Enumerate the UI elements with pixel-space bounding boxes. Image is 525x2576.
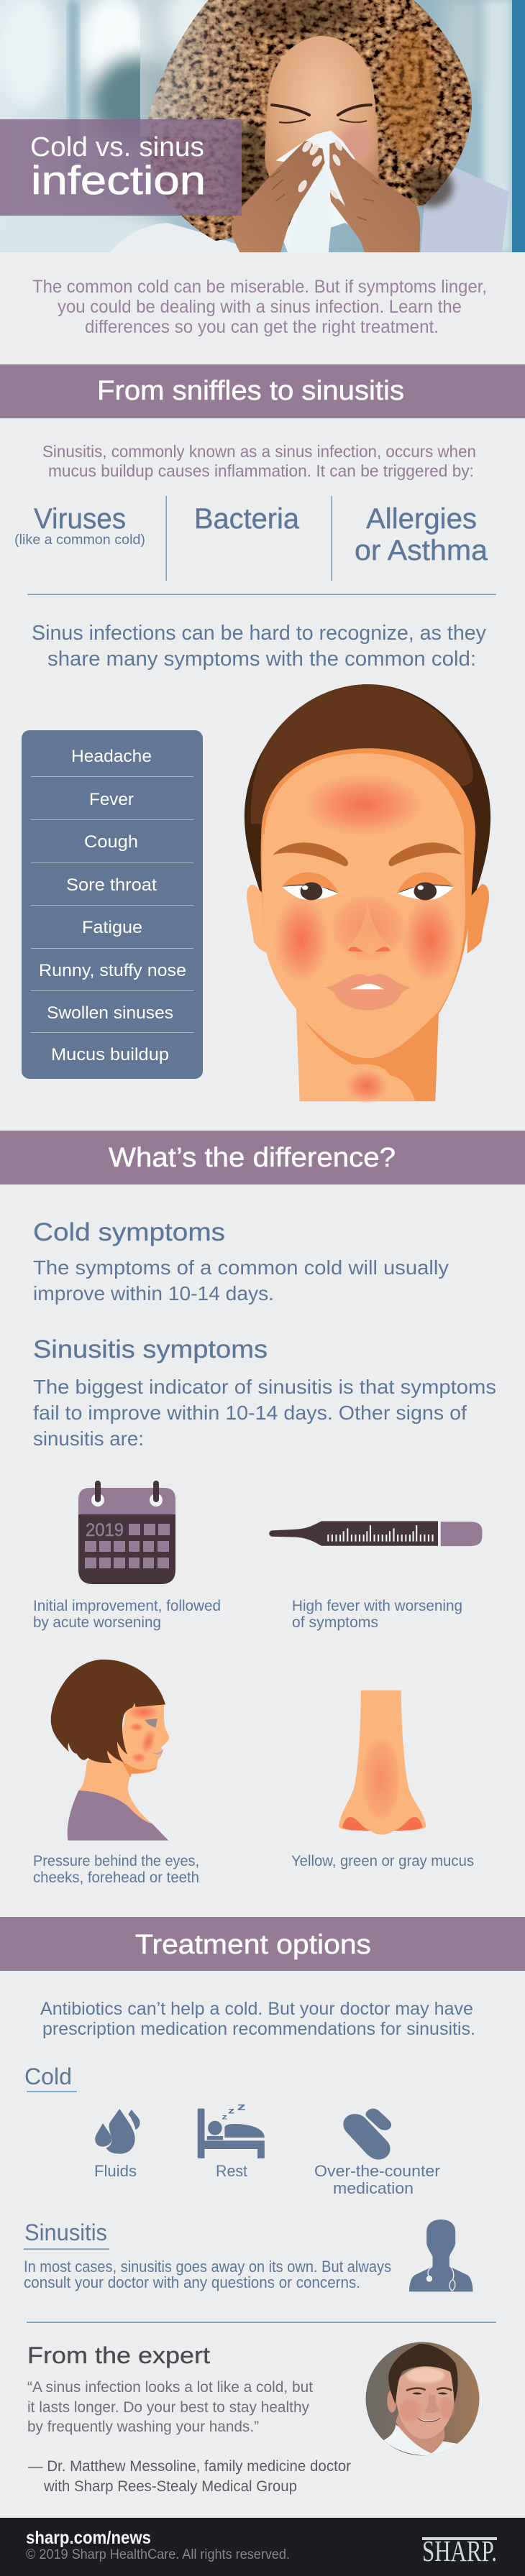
triggers row: (like a common cold) <box>14 533 145 548</box>
footer <box>0 2518 525 2576</box>
icon: medication capsules <box>343 2109 391 2160</box>
footer link: sharp.com/news <box>26 2528 151 2548</box>
icon: rest <box>198 2101 265 2158</box>
sinusitis symptoms text: Sinusitis symptoms <box>33 1335 268 1363</box>
icon: thermometer <box>269 1521 482 1546</box>
panel: symptom list <box>22 730 203 1079</box>
cold treatment labels: Rest <box>216 2162 247 2180</box>
triggers row: or Asthma <box>355 535 488 566</box>
section header: from sniffles to sinusitis: From sniffles to sinusitis <box>97 376 404 406</box>
panel: symptom list: Mucus buildup <box>51 1045 169 1064</box>
heading: from the expert: From the expert <box>27 2342 210 2368</box>
illustration: inflamed nose <box>339 1690 426 1835</box>
cold symptoms text <box>33 1218 449 1305</box>
hero title overlay <box>0 119 242 216</box>
subheading: cold: Cold <box>24 2064 72 2089</box>
expert quote <box>27 2379 313 2435</box>
shared symptoms lead-in: Sinus infections can be hard to recognize, as they <box>32 622 486 645</box>
section header: treatment options <box>0 1917 525 1971</box>
intro text: you could be dealing with a sinus infection. Learn the <box>58 297 462 317</box>
panel: symptom list: Swollen sinuses <box>47 1003 173 1023</box>
hero photo: woman sneezing into a tissue <box>0 0 525 266</box>
section header: treatment options: Treatment options <box>135 1930 371 1960</box>
shared symptoms lead-in: share many symptoms with the common cold: <box>47 648 476 671</box>
sinusitis symptoms text: The biggest indicator of sinusitis is that symptoms <box>33 1376 496 1398</box>
triggers row: Viruses <box>34 503 126 535</box>
expert quote: “A sinus infection looks a lot like a cold, but <box>27 2379 313 2396</box>
icon: calendar: 2019 <box>86 1520 124 1540</box>
sinusitis symptoms text: sinusitis are: <box>33 1427 144 1450</box>
expert portrait photo <box>365 2342 480 2457</box>
caption: calendar <box>33 1598 221 1631</box>
cold symptoms text: The symptoms of a common cold will usually <box>33 1256 449 1279</box>
cold treatment labels <box>94 2162 440 2197</box>
panel: symptom list: Headache <box>71 747 152 766</box>
cold symptoms text: Cold symptoms <box>33 1218 225 1246</box>
caption: nose: Yellow, green or gray mucus <box>291 1853 474 1869</box>
panel: symptom list: Runny, stuffy nose <box>39 961 186 980</box>
expert attribution <box>28 2458 351 2495</box>
sinusitis treatment text <box>24 2258 391 2291</box>
caption: calendar: by acute worsening <box>33 1614 161 1631</box>
caption: thermometer <box>292 1598 462 1631</box>
caption: thermometer: of symptoms <box>292 1614 378 1631</box>
icon: rest: z <box>228 2107 234 2116</box>
copyright: © 2019 Sharp HealthCare. All rights reserved. <box>26 2547 290 2562</box>
cold symptoms text: improve within 10-14 days. <box>33 1282 274 1305</box>
intro text: The common cold can be miserable. But if symptoms linger, <box>32 277 487 297</box>
sinusitis symptoms text <box>33 1335 496 1450</box>
sinusitis treatment text: In most cases, sinusitis goes away on its own. But always <box>24 2258 391 2276</box>
panel: symptom list: Fatigue <box>82 918 142 937</box>
cold treatment labels: Over-the-counter <box>314 2162 440 2180</box>
cold treatment labels: Fluids <box>94 2162 137 2180</box>
expert quote: by frequently washing your hands.” <box>27 2419 259 2435</box>
illustration: head in profile <box>51 1660 169 1841</box>
triggers row: Bacteria <box>194 503 300 535</box>
icon: rest: z <box>222 2112 227 2121</box>
caption: thermometer: High fever with worsening <box>292 1598 462 1614</box>
sinusitis definition <box>42 442 476 480</box>
section header: what's the difference <box>0 1131 525 1184</box>
cold treatment labels: medication <box>333 2179 414 2197</box>
sinusitis definition: Sinusitis, commonly known as a sinus infection, occurs when <box>42 442 476 461</box>
antibiotics text: Antibiotics can’t help a cold. But your doctor may have <box>40 1999 473 2019</box>
expert quote: it lasts longer. Do your best to stay healthy <box>27 2399 309 2416</box>
sinusitis treatment text: consult your doctor with any questions or concerns. <box>24 2273 360 2291</box>
caption: calendar: Initial improvement, followed <box>33 1598 221 1614</box>
icon: fluids <box>95 2109 140 2154</box>
panel: symptom list: Sore throat <box>66 875 157 895</box>
caption: head in profile: cheeks, forehead or teeth <box>33 1869 199 1886</box>
panel: symptom list: Cough <box>84 832 138 852</box>
triggers row: Allergies <box>366 503 477 535</box>
caption: head in profile <box>33 1853 199 1886</box>
section header: what's the difference: What’s the difference? <box>109 1143 396 1173</box>
section header: from sniffles to sinusitis <box>0 364 525 418</box>
caption: head in profile: Pressure behind the eyes, <box>33 1853 199 1869</box>
antibiotics text: prescription medication recommendations for sinusitis. <box>42 2019 475 2039</box>
intro text: differences so you can get the right treatment. <box>85 317 439 337</box>
panel: symptom list: Fever <box>89 790 134 809</box>
antibiotics text <box>40 1999 475 2039</box>
expert attribution: — Dr. Matthew Messoline, family medicine doctor <box>28 2458 351 2475</box>
sinusitis definition: mucus buildup causes inflammation. It can be triggered by: <box>48 461 474 480</box>
icon: doctor silhouette <box>409 2220 472 2291</box>
shared symptoms lead-in <box>32 622 486 671</box>
expert attribution: with Sharp Rees-Stealy Medical Group <box>43 2478 297 2495</box>
subheading: sinusitis: Sinusitis <box>24 2220 107 2245</box>
icon: rest: z <box>237 2101 246 2112</box>
sinusitis symptoms text: fail to improve within 10-14 days. Other signs of <box>33 1402 467 1424</box>
icon: calendar <box>78 1481 175 1584</box>
title line one: Cold vs. sinus <box>30 132 204 162</box>
sharp logo: SHARP. <box>422 2534 497 2567</box>
triggers row <box>14 496 488 581</box>
intro text <box>32 277 487 337</box>
illustration: front face with inflamed sinuses <box>245 684 490 1104</box>
title line two: infection <box>31 157 206 203</box>
